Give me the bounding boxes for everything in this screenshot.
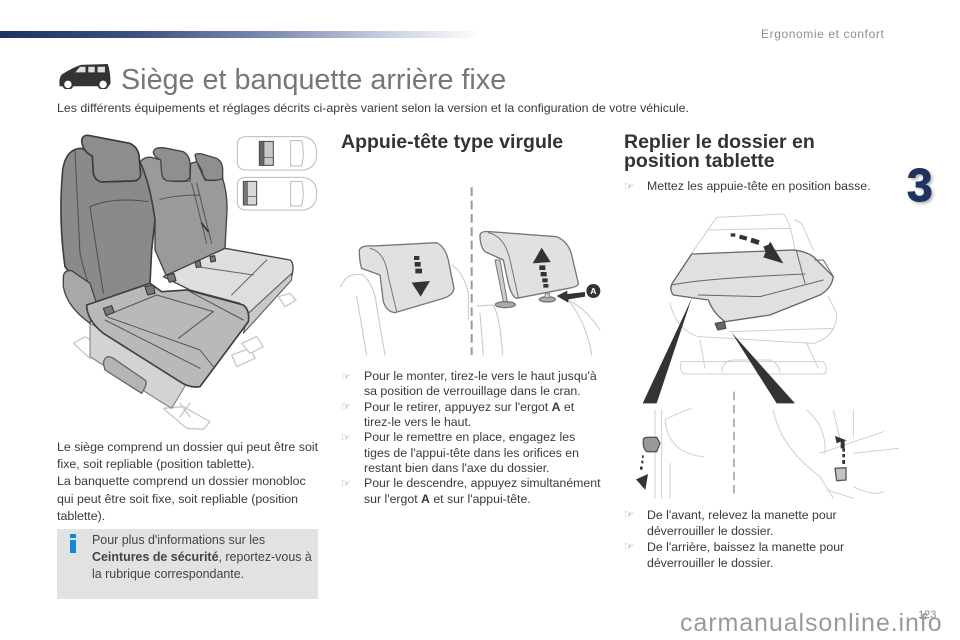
info box (57, 529, 318, 599)
headrest instructions: Pour le monter, tirez-le vers le haut jusqu'à (364, 369, 597, 383)
headrest instructions: ☞ (341, 477, 351, 490)
illustration: headrest: A (590, 286, 597, 296)
fold instructions: De l'arrière, baissez la manette pour (647, 540, 844, 554)
illustration: headrest (340, 187, 600, 356)
headrest instructions (341, 369, 601, 506)
rails (73, 293, 296, 429)
headrest instructions: ☞ (341, 431, 351, 444)
small top views (237, 137, 317, 210)
headrest instructions: tiges de l'appui-tête dans les orifices en (364, 446, 579, 460)
armrest (63, 271, 97, 323)
top gradient bar (0, 31, 482, 38)
watermark: carmanualsonline.info (680, 609, 943, 637)
info text: la rubrique correspondante. (92, 567, 244, 581)
seat back (61, 148, 155, 304)
heading: fold backrest (624, 131, 815, 172)
icon: van (59, 64, 110, 89)
info text: Pour plus d'informations sur les (92, 533, 265, 547)
step: lower headrests: Mettez les appuie-tête en position basse. (647, 179, 871, 193)
headrest instructions: restant bien dans l'axe du dossier. (364, 461, 550, 475)
headrest instructions: Pour le remettre en place, engagez les (364, 430, 575, 444)
fold instructions: De l'avant, relevez la manette pour (647, 508, 837, 522)
seat description text: fixe, soit repliable (position tablette). (57, 457, 255, 471)
fold instructions: déverrouiller le dossier. (647, 556, 773, 570)
fold instructions (624, 508, 844, 570)
fold instructions: déverrouiller le dossier. (647, 524, 773, 538)
seat cushion (87, 283, 249, 387)
headrest instructions: ☞ (341, 370, 351, 383)
heading: headrest: Appuie-tête type virgule (341, 131, 563, 153)
headrest instructions: sa position de verrouillage dans le cran. (364, 384, 581, 398)
chapter number: 3 (907, 159, 933, 211)
headrest instructions: Pour le retirer, appuyez sur l'ergot A et (364, 400, 574, 414)
bench back (140, 157, 227, 277)
headrest instructions: sur l'ergot A et sur l'appui-tête. (364, 492, 531, 506)
seat description text: tablette). (57, 509, 105, 523)
bench cushion (163, 248, 293, 327)
illustration: folded backrest (636, 214, 899, 499)
page number: 123 (918, 609, 936, 621)
seat description text: qui peut être soit fixe, soit repliable (position (57, 492, 298, 506)
base (90, 323, 187, 408)
info text: Ceintures de sécurité, reportez-vous à (92, 550, 312, 564)
heading: fold backrest: Replier le dossier en (624, 131, 815, 153)
headrest instructions: ☞ (341, 400, 351, 413)
intro text: Les différents équipements et réglages décrits ci-après varient selon la version et la configuration de votre véhicule. (57, 101, 689, 115)
heading: fold backrest: position tablette (624, 150, 775, 172)
headrest instructions: tirez-le vers le haut. (364, 415, 471, 429)
illustration: rear seat and bench (60, 134, 318, 430)
info text (92, 533, 312, 581)
headrest (82, 135, 141, 182)
seat description text: Le siège comprend un dossier qui peut être soit (57, 440, 318, 454)
fold instructions: ☞ (624, 508, 634, 521)
seat description text: La banquette comprend un dossier monobloc (57, 474, 306, 488)
step: lower headrests: ☞ (624, 180, 634, 193)
headrest instructions: Pour le descendre, appuyez simultanément (364, 476, 601, 490)
fold instructions: ☞ (624, 540, 634, 553)
seat description text (57, 440, 318, 523)
icon: info (70, 534, 76, 553)
section header: Ergonomie et confort (761, 27, 884, 41)
title: Siège et banquette arrière fixe (121, 64, 506, 96)
